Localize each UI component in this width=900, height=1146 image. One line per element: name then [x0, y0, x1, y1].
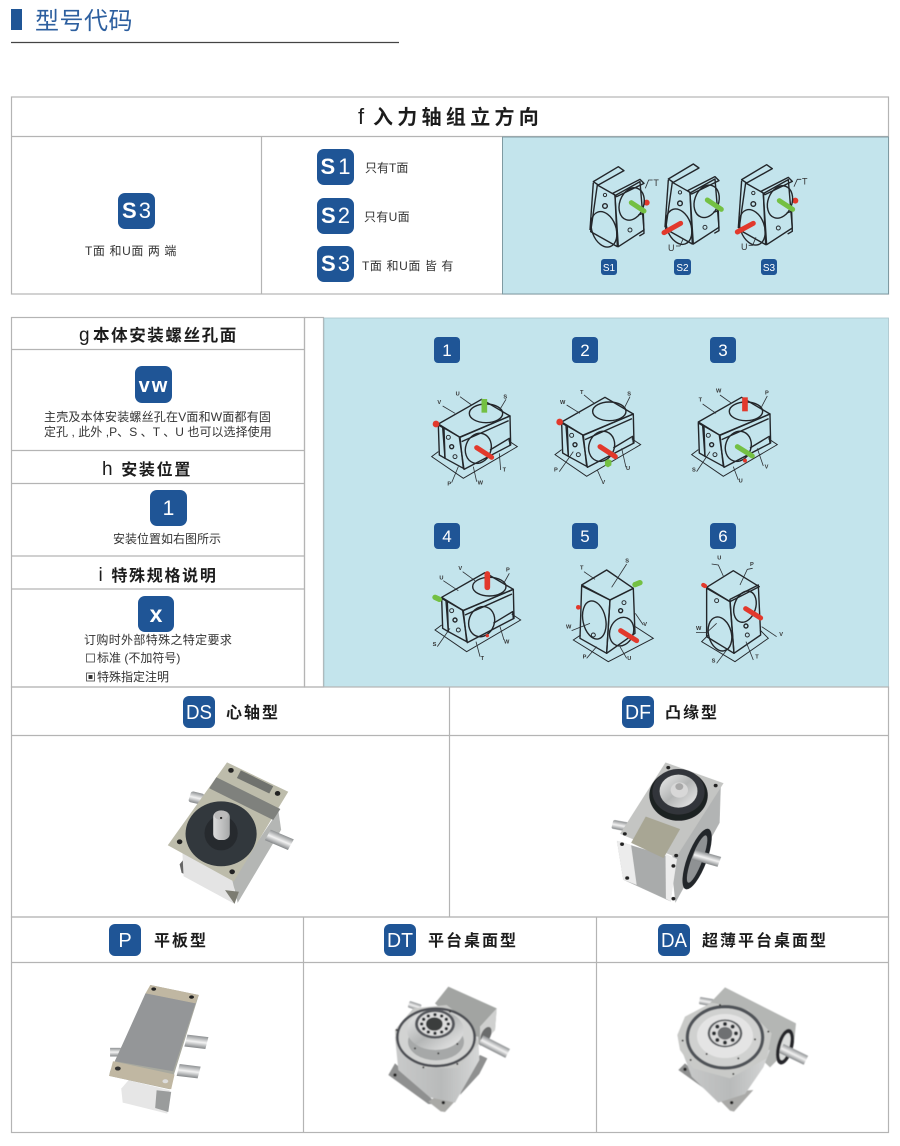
- diagram S1: T: [653, 178, 659, 188]
- header DF: [622, 696, 719, 728]
- VW description: [44, 409, 272, 439]
- badge S1: S1: [603, 263, 616, 274]
- option S2: [317, 198, 410, 234]
- diagram panel: mounting positions: [324, 318, 888, 687]
- badge S2: S2: [676, 263, 689, 274]
- diagram position 2: S: [627, 392, 631, 398]
- badge VW: [135, 366, 172, 403]
- header DA: DA: [661, 930, 688, 952]
- badge S2: [674, 259, 691, 275]
- option S1: S1: [321, 154, 350, 179]
- special spec notes: [84, 632, 232, 684]
- selected code S3: S3: [122, 198, 151, 223]
- diagram position 3: [692, 389, 777, 485]
- diagram position 2: [554, 390, 641, 486]
- product image DF: [611, 762, 724, 903]
- mounting position note: 安装位置如右图所示: [113, 531, 221, 546]
- diagram S3: U: [741, 242, 747, 252]
- diagram position 2: U: [626, 466, 630, 472]
- special spec notes: 标准 (不加符号): [97, 650, 180, 665]
- diagram position 1: V: [437, 400, 441, 406]
- diagram position 5: W: [566, 625, 572, 631]
- diagram position 3: T: [699, 398, 703, 404]
- diagram position 5: [566, 559, 653, 662]
- header DS: [183, 696, 280, 728]
- diagram position 3: V: [765, 464, 769, 470]
- heading h: h 安装位置: [102, 459, 192, 480]
- diagram S3: T: [802, 176, 808, 186]
- header DF: 凸缘型: [665, 704, 719, 722]
- panel: input shaft direction: [11, 97, 889, 294]
- heading: input shaft direction: 入力轴组立方向: [373, 105, 543, 129]
- option S3: T面 和U面 皆 有: [362, 259, 454, 273]
- header DF: DF: [625, 702, 651, 724]
- diagram position 3: S: [692, 468, 696, 474]
- diagram position 6: T: [755, 654, 759, 660]
- diagram position 6: V: [779, 632, 783, 638]
- diagram position 6: P: [750, 562, 754, 568]
- diagram position 6: S: [712, 659, 716, 665]
- badge position 2: [572, 337, 598, 363]
- header P: 平板型: [154, 932, 208, 950]
- special spec notes: 订购时外部特殊之特定要求: [84, 632, 232, 647]
- diagram position 5: P: [583, 655, 587, 661]
- badge position 3: 3: [718, 341, 728, 360]
- diagram S3: [735, 165, 808, 252]
- option S1: [317, 149, 408, 185]
- special spec notes: 特殊指定注明: [97, 669, 169, 684]
- badge position 6: [710, 523, 736, 549]
- diagram position 5: S: [625, 559, 629, 565]
- diagram position 4: [433, 566, 521, 662]
- header DT: DT: [387, 930, 413, 952]
- badge position 6: 6: [718, 527, 728, 546]
- diagram panel: S1 S2 S3 shafts: [502, 137, 888, 294]
- diagram position 4: U: [439, 575, 443, 581]
- badge position 5: [572, 523, 598, 549]
- diagram position 2: T: [580, 390, 584, 396]
- product image P: [109, 985, 208, 1114]
- panel: product row 2: [11, 917, 889, 1132]
- badge position 3: [710, 337, 736, 363]
- option S3: S3: [321, 251, 350, 276]
- diagram position 5: T: [580, 565, 584, 571]
- diagram position 3: W: [716, 389, 722, 395]
- panel: mounting specification: [11, 318, 888, 687]
- diagram position 6: W: [696, 626, 702, 632]
- badge S3: S3: [763, 263, 776, 274]
- option S1: 只有T面: [365, 161, 408, 175]
- badge 1: 1: [163, 497, 174, 520]
- option S3: [317, 246, 454, 282]
- header DA: 超薄平台桌面型: [702, 931, 828, 950]
- VW description: 主壳及本体安装螺丝孔在V面和W面都有固: [44, 409, 271, 424]
- diagram position 5: V: [643, 622, 647, 628]
- header P: [109, 924, 208, 956]
- diagram position 4: P: [506, 567, 510, 573]
- header P: P: [118, 930, 132, 952]
- diagram position 5: U: [627, 656, 631, 662]
- header DT: [384, 924, 518, 956]
- badge S3: [761, 259, 777, 275]
- option S2: S2: [321, 203, 350, 228]
- diagram position 6: [696, 555, 783, 665]
- diagram position 4: V: [458, 566, 462, 572]
- selected code S3: T面 和U面 两 端: [85, 244, 177, 258]
- panel: product row 1: [11, 687, 889, 917]
- diagram position 1: U: [456, 392, 460, 398]
- heading: input shaft direction: f: [358, 104, 368, 129]
- heading i: i 特殊规格说明: [98, 565, 218, 586]
- badge position 4: 4: [442, 527, 452, 546]
- diagram position 1: P: [447, 481, 451, 487]
- badge X: [138, 596, 174, 632]
- badge S1: [601, 259, 617, 275]
- product image DA: [677, 987, 808, 1112]
- diagram position 1: T: [503, 468, 507, 474]
- badge X: x: [150, 601, 163, 627]
- badge position 2: 2: [580, 341, 590, 360]
- title: [11, 8, 399, 42]
- header DS: DS: [186, 702, 212, 724]
- title: 型号代码: [35, 8, 133, 35]
- diagram S1: [586, 167, 659, 251]
- heading g: g: [79, 325, 91, 346]
- VW description: 定孔 , 此外 ,P、S 、T 、U 也可以选择使用: [44, 424, 272, 439]
- selected code S3: [85, 193, 177, 258]
- diagram position 2: V: [601, 480, 605, 486]
- diagram position 2: W: [560, 400, 566, 406]
- badge position 5: 5: [580, 527, 590, 546]
- header DS: 心轴型: [226, 704, 280, 722]
- product image DS: [168, 762, 294, 904]
- diagram position 1: S: [503, 395, 507, 401]
- badge 1: [150, 490, 187, 526]
- diagram position 4: W: [504, 639, 510, 645]
- diagram S2: U: [668, 243, 674, 253]
- product image DT: [388, 987, 510, 1112]
- badge position 1: [434, 337, 460, 363]
- diagram position 4: S: [433, 642, 437, 648]
- diagram position 4: T: [481, 656, 485, 662]
- badge position 1: 1: [442, 341, 452, 360]
- badge VW: vw: [139, 375, 169, 397]
- option S2: 只有U面: [364, 210, 410, 224]
- header DA: [658, 924, 828, 956]
- badge position 4: [434, 523, 460, 549]
- diagram position 1: W: [478, 481, 484, 487]
- diagram position 3: P: [765, 390, 769, 396]
- diagram position 6: U: [717, 555, 721, 561]
- diagram position 1: [432, 392, 517, 487]
- diagram S2: [661, 164, 724, 253]
- diagram position 2: P: [554, 468, 558, 474]
- diagram position 3: U: [739, 479, 743, 485]
- heading g: 本体安装螺丝孔面: [93, 326, 238, 345]
- header DT: 平台桌面型: [428, 931, 518, 950]
